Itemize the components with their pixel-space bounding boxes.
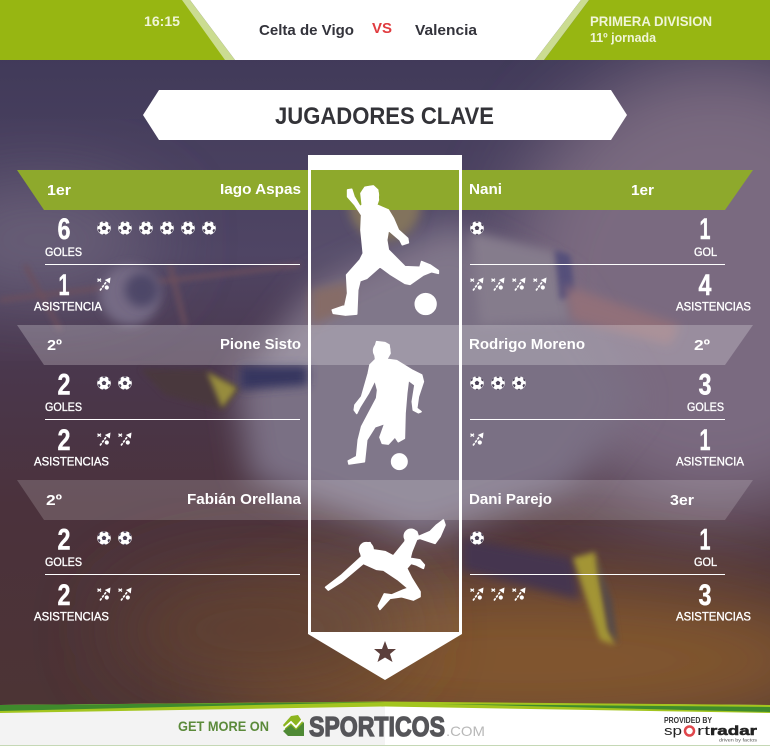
assists number: 1 <box>58 269 70 302</box>
panel: rank 1 away player <box>469 181 751 314</box>
kick-off time: 16:15 <box>144 13 180 29</box>
goals number: 2 <box>58 524 70 556</box>
goal icons <box>97 221 216 235</box>
assists number: 1 <box>700 424 710 457</box>
rank band 3 <box>17 480 753 520</box>
footer <box>0 702 770 746</box>
driven by factos: driven by factos <box>719 738 758 742</box>
sporticos wordmark: SPORTICOS <box>309 711 445 742</box>
panel: rank 3 home player <box>34 491 302 624</box>
goals label: GOL <box>694 245 717 259</box>
rank: 1er <box>47 182 71 199</box>
matchday: 11º jornada <box>590 31 657 45</box>
goals label: GOLES <box>45 245 82 259</box>
icon: kicking player silhouette <box>332 186 438 315</box>
player name: Iago Aspas <box>220 181 301 198</box>
player name: Nani <box>469 181 502 198</box>
vs label: VS <box>372 20 392 37</box>
assists label: ASISTENCIAS <box>676 610 751 624</box>
player name: Pione Sisto <box>220 336 301 353</box>
assists label: ASISTENCIAS <box>34 610 109 624</box>
goals label: GOLES <box>45 555 82 569</box>
home team: Celta de Vigo <box>259 22 354 39</box>
rank band 1 <box>17 170 753 210</box>
assist icon <box>470 432 484 446</box>
assists number: 2 <box>58 424 70 457</box>
provided by: PROVIDED BY <box>664 716 713 725</box>
goals number: 1 <box>700 213 710 246</box>
assist icon <box>98 278 110 290</box>
panel: white match header <box>190 0 581 60</box>
sportradar logo: radar <box>710 723 757 738</box>
goal icon <box>470 531 484 545</box>
player name: Fabián Orellana <box>187 491 302 508</box>
panel: rank 2 home player <box>34 336 301 468</box>
goals number: 1 <box>700 524 710 556</box>
assist icons <box>98 432 132 446</box>
center frame with star chevron <box>308 155 462 680</box>
goal icons <box>97 376 132 390</box>
icon: sporticos logo <box>283 715 304 736</box>
goals number: 6 <box>58 213 70 246</box>
dot com: .COM <box>446 723 485 739</box>
sportradar logo: sp <box>664 723 682 738</box>
footer wave <box>0 702 770 713</box>
panel: left green header <box>0 0 226 60</box>
rank band 2 <box>17 325 753 365</box>
center panel tint <box>311 170 459 632</box>
assist icons <box>98 588 132 600</box>
title banner <box>143 90 627 140</box>
assists label: ASISTENCIAS <box>676 300 751 314</box>
assists label: ASISTENCIA <box>34 300 102 314</box>
assists label: ASISTENCIAS <box>34 454 109 468</box>
assist icons <box>470 588 526 600</box>
rank: 2º <box>47 337 63 354</box>
icon: dribbling player silhouette <box>348 342 423 469</box>
assist icons <box>470 278 546 290</box>
assists number: 4 <box>698 269 712 302</box>
assists number: 2 <box>58 579 70 612</box>
panel: rank 1 home player <box>34 181 301 314</box>
goal icons <box>97 531 132 545</box>
goals number: 3 <box>698 368 712 402</box>
goals number: 2 <box>58 368 70 402</box>
call to action: GET MORE ON <box>178 718 269 734</box>
rank: 1er <box>631 182 654 199</box>
goals label: GOLES <box>687 400 724 414</box>
goals label: GOLES <box>45 400 82 414</box>
goal icons <box>470 376 526 390</box>
goals label: GOL <box>694 555 717 569</box>
icon: volley player silhouette <box>326 520 445 609</box>
rank: 3er <box>670 492 694 509</box>
icon: star <box>374 641 396 662</box>
competition: PRIMERA DIVISION <box>590 13 712 29</box>
rank: 2º <box>694 337 711 354</box>
right header stripe <box>535 0 589 60</box>
footer white panel <box>385 702 770 746</box>
goal icon <box>470 221 484 235</box>
assists label: ASISTENCIA <box>676 454 744 468</box>
player name: Rodrigo Moreno <box>469 336 585 353</box>
away team: Valencia <box>415 22 478 39</box>
assists number: 3 <box>698 579 712 612</box>
left header stripe <box>182 0 235 60</box>
panel: rank 3 away player <box>469 491 751 624</box>
header bar <box>0 0 770 60</box>
rank: 2º <box>46 492 63 509</box>
player name: Dani Parejo <box>469 491 552 508</box>
panel: rank 2 away player <box>469 336 744 468</box>
sportradar logo <box>664 723 757 738</box>
sportradar logo: rt <box>697 723 711 738</box>
panel: right green header <box>544 0 770 60</box>
title: JUGADORES CLAVE <box>275 103 494 130</box>
